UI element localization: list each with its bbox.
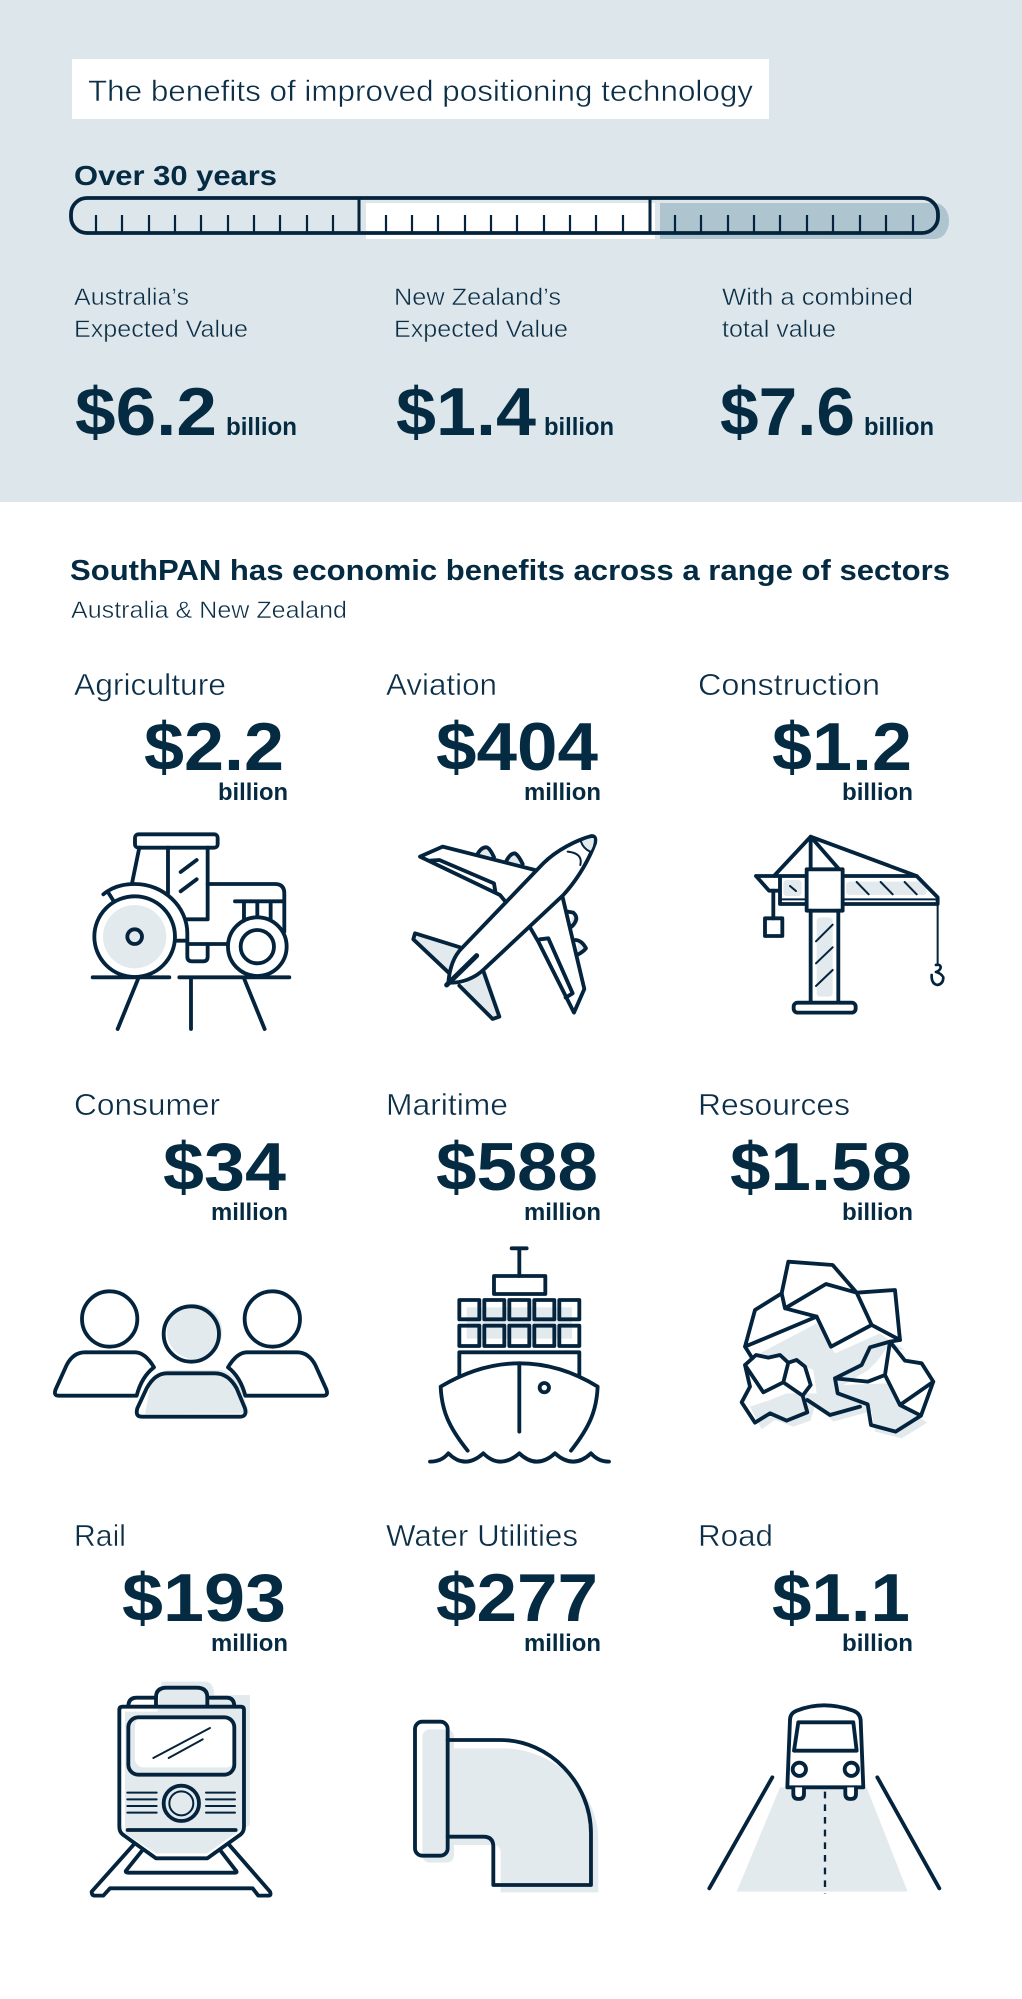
column: New Zealand: New Zealand’s	[394, 284, 561, 311]
sector: Water Utilities	[386, 1518, 601, 1892]
column: Australia: billion	[226, 413, 297, 441]
sector: Consumer	[55, 1087, 327, 1417]
title	[72, 59, 769, 119]
icon: crane	[756, 837, 943, 1013]
sector: Water Utilities: $277	[436, 1560, 598, 1636]
sector: Construction: billion	[842, 779, 913, 806]
sector: Maritime: Maritime	[386, 1087, 508, 1122]
sector: Maritime	[386, 1087, 609, 1462]
column: New Zealand: Expected Value	[394, 316, 568, 343]
sector: Rail: $193	[122, 1560, 286, 1636]
sector: Road: Road	[698, 1518, 773, 1553]
panel: benefits summary	[0, 0, 1022, 502]
sector: Water Utilities: million	[524, 1630, 601, 1657]
column: combined: With a combined	[722, 284, 913, 311]
sector: Agriculture: $2.2	[144, 709, 284, 785]
icon: tractor	[93, 834, 289, 1029]
sector: Construction: Construction	[698, 667, 880, 702]
column: New Zealand: $1.4	[396, 374, 536, 450]
icon: people	[55, 1291, 327, 1417]
sector: Rail: million	[211, 1630, 288, 1657]
sector: Maritime: $588	[436, 1129, 598, 1205]
column: combined: billion	[864, 413, 934, 441]
sector: Resources: $1.58	[730, 1129, 912, 1205]
column: Australia: Australia’s	[74, 284, 189, 311]
sector: Road	[698, 1518, 939, 1893]
sector: Resources: billion	[842, 1199, 913, 1226]
column: Australia	[74, 284, 297, 450]
sector: Maritime: million	[524, 1199, 601, 1226]
column: combined: $7.6	[720, 374, 855, 450]
icon: rocks	[742, 1262, 933, 1438]
timeline bar	[71, 198, 949, 239]
sector: Agriculture: billion	[218, 779, 288, 806]
column: New Zealand: billion	[544, 413, 614, 441]
sector: Rail: Rail	[74, 1518, 126, 1553]
sector: Agriculture	[74, 667, 289, 1029]
sector: Resources: Resources	[698, 1087, 850, 1122]
icon: container ship	[430, 1248, 609, 1462]
icon: train	[92, 1682, 271, 1896]
column: Australia: Expected Value	[74, 316, 248, 343]
sector: Agriculture: Agriculture	[74, 667, 226, 702]
icon: bus on road	[709, 1705, 939, 1893]
sector: Road: $1.1	[772, 1560, 910, 1636]
icon: water pipe	[415, 1722, 598, 1892]
sector: Resources	[698, 1087, 933, 1438]
column: combined	[720, 284, 934, 450]
column: New Zealand	[394, 284, 614, 450]
sector: Consumer: million	[211, 1199, 288, 1226]
sector: Aviation: million	[524, 779, 601, 806]
sector: Aviation: $404	[436, 709, 598, 785]
sector: Consumer: Consumer	[74, 1087, 220, 1122]
sector: Water Utilities: Water Utilities	[386, 1518, 578, 1553]
sector: Road: billion	[842, 1630, 913, 1657]
column: combined: total value	[722, 316, 836, 343]
section subheading: Australia & New Zealand	[71, 597, 347, 624]
sector: Construction: $1.2	[772, 709, 912, 785]
sector: Aviation	[386, 667, 601, 1020]
sector: Rail	[74, 1518, 288, 1896]
sector: Consumer: $34	[163, 1129, 286, 1205]
icon: airplane	[413, 836, 595, 1020]
sector: Aviation: Aviation	[386, 667, 497, 702]
section heading: SouthPAN has economic benefits across a range of sectors	[70, 555, 950, 587]
heading: over 30 years: Over 30 years	[74, 160, 277, 191]
title: The benefits of improved positioning technology	[88, 75, 753, 108]
sector: Construction	[698, 667, 943, 1013]
column: Australia: $6.2	[75, 374, 217, 450]
